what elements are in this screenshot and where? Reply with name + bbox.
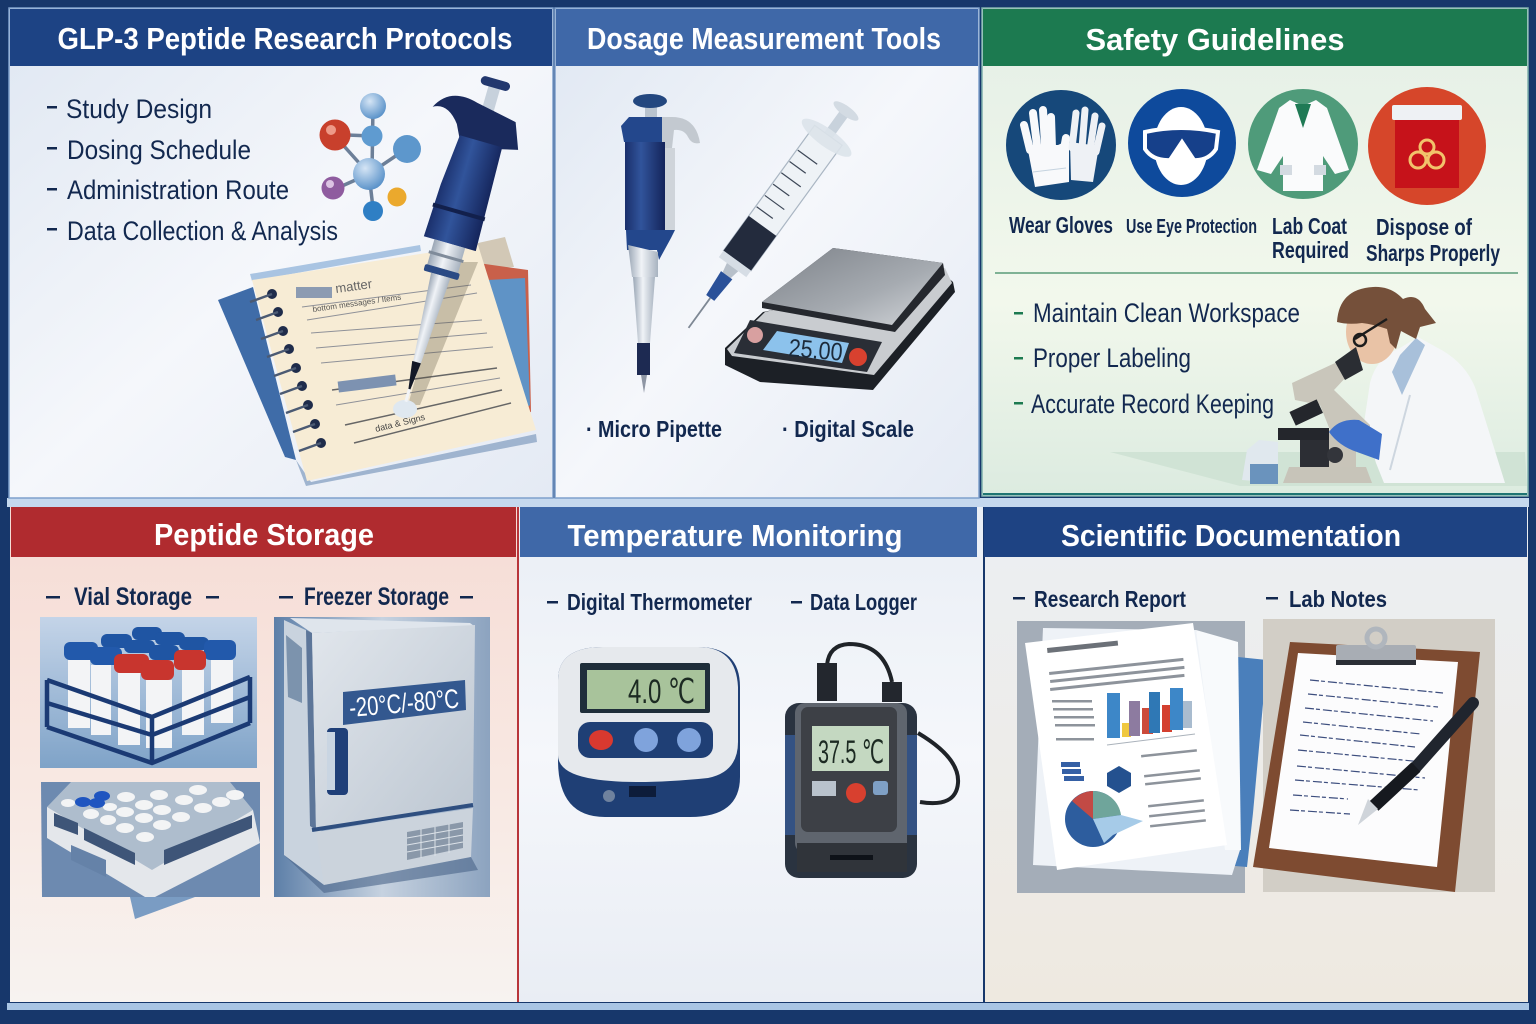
safety list: Proper Labeling [1033,343,1191,373]
image: vial rack [40,617,257,768]
scientist at microscope [1110,287,1527,486]
safety list: Accurate Record Keeping [1031,389,1274,419]
heading: research protocols [10,9,552,66]
icon: molecule [320,93,421,221]
heading: research protocols: GLP-3 Peptide Research Protocols [58,21,512,56]
label: freezer storage: Freezer Storage [304,583,449,611]
heading: peptide storage [11,507,516,557]
icon: eye protection [1128,89,1236,197]
protocol list: Study Design [66,94,212,124]
label: digital thermometer: Digital Thermometer [567,589,752,615]
icon: gloves [1006,90,1116,200]
icon: lab coat [1248,89,1358,199]
heading: peptide storage: Peptide Storage [154,517,374,552]
label: data logger [791,589,917,615]
heading: documentation [984,507,1527,557]
temperature label: -20°C/-80°C [348,684,460,723]
heading: documentation: Scientific Documentation [1061,518,1401,553]
panel: safety [982,8,1528,496]
label: digital scale: · Digital Scale [782,416,914,442]
icon: digital thermometer: 4.0 ℃ [628,673,695,711]
heading: temperature monitoring [520,507,977,557]
safety list [1014,298,1300,419]
icon: digital thermometer [558,647,740,817]
notebook illustration: bottom messages / Items [312,293,402,314]
icon: digital scale [725,248,955,390]
icon: digital scale: 25.00 [787,334,844,367]
panel: dosage tools [555,8,979,498]
safety icon labels: Wear Gloves [1009,212,1113,238]
label: lab notes: Lab Notes [1289,586,1387,612]
safety icon labels [1009,212,1500,266]
safety icon labels: Lab Coat [1272,213,1347,239]
heading: dosage tools [556,9,978,66]
panel: peptide storage [10,507,519,1002]
heading: safety [983,9,1527,66]
label: data logger: Data Logger [810,589,917,615]
safety icon labels: Required [1272,237,1349,263]
panel: research protocols [9,8,553,498]
label: vial storage: Vial Storage [74,583,192,611]
image: freezer [274,617,490,897]
panel: documentation [984,507,1528,1002]
notebook illustration: data & Signs [374,412,426,434]
icon: syringe [664,89,873,345]
image: lab notes clipboard [1253,619,1495,892]
protocol list [47,94,338,246]
icon: data logger: 37.5 ℃ [818,734,884,770]
panel: temperature monitoring [519,507,983,1002]
icon: micro pipette [621,94,700,393]
protocol list: Dosing Schedule [67,135,251,165]
icon: data logger [785,644,958,878]
safety icon labels: Use Eye Protection [1126,216,1257,238]
protocol list: Administration Route [67,175,289,205]
safety icon labels: Dispose of [1376,214,1472,240]
label: micro pipette: · Micro Pipette [586,416,722,442]
heading: safety: Safety Guidelines [1086,22,1344,57]
safety list: Maintain Clean Workspace [1033,298,1300,328]
image: vial tray [41,782,260,919]
notebook illustration [218,237,537,486]
heading: dosage tools: Dosage Measurement Tools [587,21,941,56]
label: research report: Research Report [1034,586,1186,612]
image: research report [1017,621,1267,893]
icon: sharps disposal [1368,87,1486,205]
heading: temperature monitoring: Temperature Monitoring [568,518,902,553]
icon: micropipette [353,64,535,418]
notebook illustration: matter [334,276,374,296]
protocol list: Data Collection & Analysis [67,216,338,246]
